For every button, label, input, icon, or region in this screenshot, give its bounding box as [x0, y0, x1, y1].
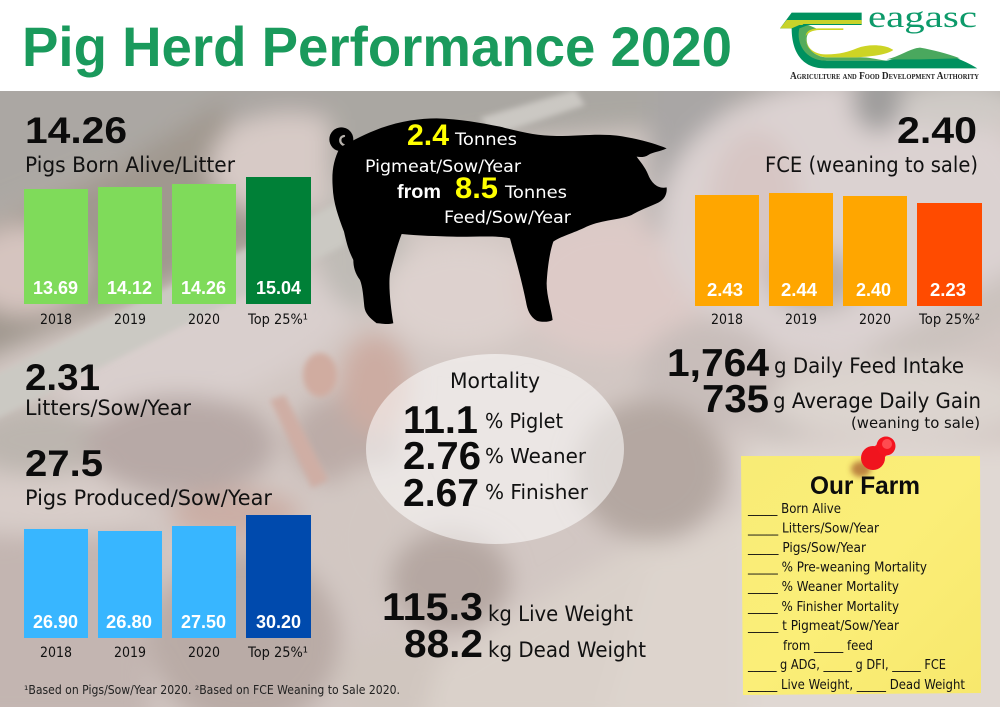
fill-in list [747, 501, 965, 693]
bar chart: FCE: 2.43 [707, 280, 743, 300]
fill-in list: _____ % Finisher Mortality [747, 599, 899, 615]
stat label: Pigs Produced/Sow/Year [25, 486, 272, 510]
bar chart: born alive: 13.69 [33, 278, 78, 298]
logo: Teagasc: eagasc [868, 0, 977, 34]
bar chart: pigs produced: 2018 [40, 645, 72, 661]
panel: FCE [695, 110, 982, 328]
finisher mortality [403, 472, 589, 515]
header band [0, 0, 1000, 91]
panel: feed intake and daily gain: g Average Daily Gain [773, 389, 981, 413]
bar chart: born alive [24, 177, 311, 328]
stat: 27.5: 27.5 [25, 443, 103, 484]
bar chart: pigs produced [24, 515, 311, 661]
pipe [0, 206, 344, 416]
footnote: ¹Based on Pigs/Sow/Year 2020. ²Based on FCE Weaning to Sale 2020. [24, 683, 400, 697]
panel: feed intake and daily gain [667, 342, 981, 432]
heading: Our Farm [810, 472, 920, 500]
bar chart: born alive: 15.04 [256, 278, 301, 298]
bar chart: pigs produced: 2019 [114, 645, 146, 661]
panel: live and dead weight: 88.2 [404, 623, 483, 666]
fill-in list: _____ Litters/Sow/Year [747, 520, 879, 536]
pig panel [329, 118, 667, 324]
bar chart: FCE: 2.23 [930, 280, 966, 300]
logo: Teagasc [780, 0, 979, 82]
panel: feed intake and daily gain: 735 [702, 378, 769, 421]
bar chart: born alive: 14.26 [181, 278, 226, 298]
bar chart: born alive: Top 25%¹ [247, 312, 308, 328]
bar chart: born alive: 2019 [114, 312, 146, 328]
ellipse background [366, 354, 624, 544]
fill-in list: _____ Born Alive [747, 501, 841, 517]
title: Pig Herd Performance 2020 [22, 15, 732, 78]
stat: 8.5 tonnes feed: from [397, 182, 441, 203]
weaner mortality: % Weaner [485, 444, 587, 468]
fill-in list: from _____ feed [783, 638, 873, 654]
panel: pigs produced [24, 443, 311, 661]
stat: 2.4 tonnes pigmeat: Tonnes [454, 130, 517, 150]
panel: feed intake and daily gain: (weaning to sale) [851, 414, 980, 432]
upper band [196, 91, 1000, 130]
panel: litters per sow: 2.31 [25, 357, 100, 398]
fill-in list: _____ t Pigmeat/Sow/Year [747, 618, 899, 634]
panel: feed intake and daily gain: g Daily Feed Intake [774, 354, 964, 378]
bar chart: born alive: 2018 [40, 312, 72, 328]
stat: 2.4 tonnes pigmeat [365, 119, 521, 177]
piglet mortality: 11.1 [403, 399, 478, 442]
stat: 8.5 tonnes feed: 8.5 [455, 172, 498, 205]
bar chart: FCE: 2.40 [856, 280, 891, 300]
logo: Teagasc: Agriculture and Food Development Authority [790, 71, 979, 82]
icon: red push pin [851, 436, 896, 477]
panel: feed intake and daily gain: 1,764 [667, 342, 769, 385]
panel: live and dead weight: kg Live Weight [488, 602, 633, 626]
panel: live and dead weight [382, 586, 646, 666]
sticky note paper [741, 456, 981, 695]
panel: litters per sow [25, 357, 191, 420]
stat: 14.26: 14.26 [25, 110, 127, 151]
bar chart: pigs produced: Top 25%¹ [247, 645, 308, 661]
stat: 2.4 tonnes pigmeat: 2.4 [407, 119, 449, 152]
fill-in list: _____ Pigs/Sow/Year [747, 540, 866, 556]
panel: mortality [366, 354, 624, 544]
bar chart: FCE: 2020 [859, 312, 891, 328]
finisher mortality: 2.67 [403, 472, 479, 515]
bar chart: pigs produced: 26.80 [106, 612, 152, 632]
weaner mortality: 2.76 [403, 435, 481, 478]
stat: 8.5 tonnes feed [397, 172, 571, 228]
piglet mortality: % Piglet [485, 409, 563, 433]
stat: 8.5 tonnes feed: Feed/Sow/Year [444, 208, 571, 228]
stat label: FCE (weaning to sale) [765, 153, 978, 177]
bar chart: FCE [695, 193, 982, 328]
fill-in list: _____ % Weaner Mortality [747, 579, 899, 595]
stat: 2.40: 2.40 [897, 110, 977, 151]
panel: pigs born alive [24, 110, 311, 328]
bar chart: FCE: Top 25%² [918, 312, 980, 328]
finisher mortality: % Finisher [485, 480, 589, 504]
bar chart: pigs produced: 30.20 [256, 612, 301, 632]
bar chart: born alive: 14.12 [107, 278, 152, 298]
bar chart: FCE: 2.44 [781, 280, 817, 300]
lower band [0, 405, 110, 475]
panel: our farm sticky note [741, 436, 981, 695]
fill-in list: _____ Live Weight, _____ Dead Weight [747, 677, 965, 693]
fill-in list: _____ % Pre-weaning Mortality [747, 560, 927, 576]
icon: pig silhouette [329, 118, 667, 324]
weaner mortality [403, 435, 587, 478]
bar chart: born alive: 2020 [188, 312, 220, 328]
bar chart: pigs produced: 27.50 [181, 612, 226, 632]
panel: live and dead weight: kg Dead Weight [488, 638, 646, 662]
stat label: Pigs Born Alive/Litter [25, 153, 235, 177]
panel: litters per sow: Litters/Sow/Year [25, 396, 191, 420]
bar chart: pigs produced: 2020 [188, 645, 220, 661]
stat: 2.4 tonnes pigmeat: Pigmeat/Sow/Year [365, 157, 521, 177]
stat: 8.5 tonnes feed: Tonnes [504, 183, 567, 203]
fill-in list: _____ g ADG, _____ g DFI, _____ FCE [747, 657, 946, 673]
bar chart: FCE: 2019 [785, 312, 817, 328]
heading: Mortality [450, 369, 540, 393]
panel: live and dead weight: 115.3 [382, 586, 483, 629]
bar chart: pigs produced: 26.90 [33, 612, 78, 632]
bar chart: FCE: 2018 [711, 312, 743, 328]
piglet mortality [403, 399, 563, 442]
